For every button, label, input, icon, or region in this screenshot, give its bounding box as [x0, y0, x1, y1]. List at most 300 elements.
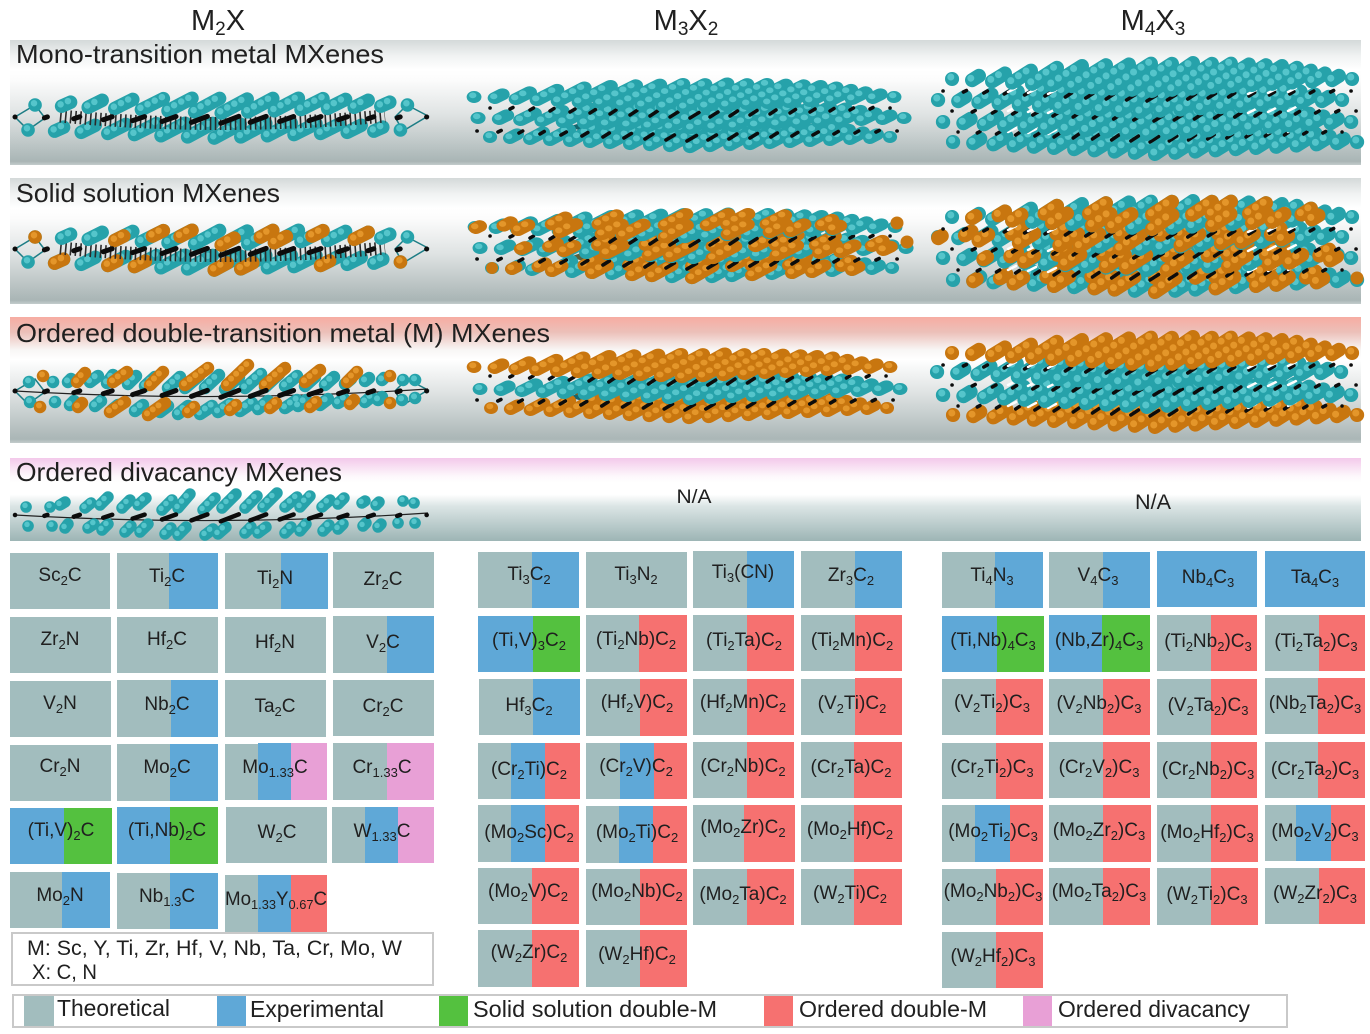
cell: (Mo2Ta2)C3: (Mo [1052, 881, 1084, 902]
cell: (V2Ti2)C3: (V [954, 692, 973, 713]
cell: Cr1.33C: 1.33 [373, 765, 398, 780]
note: M3X2 not applicable: N/A [676, 487, 712, 508]
cell: Ta4C3: 3 [1332, 575, 1339, 590]
cell: (V2Ti)C2: Ti)C [844, 693, 879, 714]
cell: (Ti2Nb2)C3: (Ti [1164, 631, 1186, 652]
cell: (Cr2Ta2)C3 [1265, 742, 1365, 798]
cell: Ti4N3: Ti [970, 565, 985, 586]
cell: Mo1.33C: 1.33 [269, 765, 294, 780]
cell: Nb1.3C: 1.3 [163, 894, 181, 909]
cell: Nb2C: Nb [144, 694, 169, 715]
cell: Hf3C2: C [532, 695, 545, 716]
cell: Ta2C: Ta [254, 696, 275, 717]
cell: (W2Zr2)C3 [1265, 868, 1365, 924]
cell: (Cr2Ti2)C3: 2 [977, 765, 984, 780]
cell: (V2Ta2)C3: Ta [1194, 695, 1214, 716]
cell: (V2Nb2)C3: Nb [1083, 693, 1107, 714]
cell: Mo2C: Mo [143, 757, 170, 778]
cell: Nb1.3C: C [181, 886, 195, 907]
column heading: M3X2: 2 [708, 19, 718, 40]
cell: (Mo2Zr)C2: 2 [733, 825, 740, 840]
cell: Nb2C: 2 [169, 702, 176, 717]
cell: Ta2C: C [282, 696, 296, 717]
cell: (V2Ti)C2: (V [818, 693, 837, 714]
cell: (Cr2V)C2: 2 [626, 764, 633, 779]
cell: Mo2N [10, 872, 110, 928]
cell: Mo1.33Y0.67C: 1.33 [251, 897, 276, 912]
cell: (Mo2Ta2)C3: 2 [1084, 889, 1092, 904]
cell: (Cr2V2)C3: )C [1112, 757, 1132, 778]
cell: (Mo2Nb2)C3: 3 [1035, 889, 1042, 904]
legend item: theoretical: Theoretical [57, 995, 170, 1021]
cell: Zr3C2: 2 [867, 573, 874, 588]
cell: Nb4C3: 4 [1206, 575, 1213, 590]
cell: (Cr2Ti2)C3: 3 [1026, 765, 1034, 780]
cell: (Mo2Hf2)C3 [1157, 805, 1258, 862]
cell: (Ti2Ta)C2: Ta)C [735, 630, 775, 651]
model: M4X3 ordered double-M [936, 335, 1357, 427]
cell: Cr2C [333, 680, 434, 736]
cell: (Mo2Ta)C2: 2 [779, 892, 787, 907]
cell: (Hf2Mn)C2: Mn)C [732, 692, 779, 713]
cell: (V2Ti)C2 [801, 678, 902, 735]
heading: ordered double-M: Ordered double-transition metal (M) MXenes [16, 318, 550, 348]
cell: (Ti2Ta)C2: 2 [775, 638, 782, 653]
cell: (Cr2Ta2)C3: 2 [1297, 767, 1305, 782]
cell: Ta2C [225, 680, 326, 737]
cell: (Cr2Nb2)C3: 2 [1220, 767, 1227, 782]
cell: Nb4C3: Nb [1182, 567, 1206, 588]
cell: (W2Hf2)C3 [942, 932, 1043, 988]
cell: (Cr2Nb)C2: (Cr [700, 756, 727, 777]
cell: (W2Zr2)C3: (W [1273, 883, 1297, 904]
cell: (W2Zr)C2: (W [491, 942, 515, 963]
cell: V2N: N [63, 693, 77, 714]
cell: Ti2N: 2 [272, 576, 279, 591]
cell: (W2Zr)C2 [478, 930, 579, 987]
cell: (Hf2V)C2: (Hf [601, 692, 626, 713]
column heading: M2X: 2 [215, 19, 226, 40]
cell: (V2Ta2)C3: 2 [1187, 703, 1194, 718]
cell: (Mo2Ti2)C3: )C [1011, 821, 1031, 842]
cell: (Mo2Sc)C2 [478, 805, 579, 862]
cell: (Hf2Mn)C2: 2 [725, 700, 732, 715]
cell: (Mo2Hf)C2 [801, 805, 902, 862]
cell: (Mo2Hf2)C3: )C [1226, 822, 1247, 843]
cell: (W2Zr)C2: Zr)C [522, 942, 560, 963]
cell: (Mo2Hf2)C3: (Mo [1160, 822, 1193, 843]
cell: Cr2C: C [390, 696, 404, 717]
cell: (Cr2Ti2)C3: Ti [984, 757, 999, 778]
cell: (W2Ti)C2: Ti)C [845, 883, 880, 904]
cell: (Mo2Zr)C2 [693, 805, 795, 862]
cell: (Mo2Ta)C2: (Mo [699, 884, 732, 905]
cell: Hf3C2: Hf [505, 695, 524, 716]
cell: (Mo2Nb)C2: (Mo [591, 881, 624, 902]
cell: Nb4C3 [1157, 551, 1257, 607]
cell: (Mo2Zr2)C3: 2 [1086, 828, 1093, 843]
cell: V2C: V [366, 632, 379, 653]
cell: (Mo2Nb)C2: Nb)C [631, 881, 676, 902]
cell: (Mo2V)C2 [478, 868, 579, 924]
cell: (Mo2Ti2)C3: 3 [1031, 829, 1038, 844]
column heading: M3X2: 3 [678, 19, 688, 40]
cell: (Ti2Ta2)C3: Ta [1303, 631, 1324, 652]
cell: (Cr2Ta2)C3: Ta [1305, 759, 1325, 780]
cell: (W2Ti2)C3 [1157, 868, 1258, 925]
cell: (Mo2Ti)C2 [586, 806, 687, 863]
cell: Zr3C2: 3 [846, 573, 853, 588]
cell: (Mo2Zr2)C3: (Mo [1053, 820, 1086, 841]
cell: W1.33C: C [397, 821, 410, 842]
cell: Nb4C3: C [1213, 567, 1227, 588]
cell: (Hf2Mn)C2 [693, 679, 794, 735]
cell: (Mo2Ta)C2: Ta)C [739, 884, 779, 905]
cell: (Cr2Ti)C2: (Cr [491, 759, 517, 780]
cell: (Mo2V2)C3: 2 [1324, 829, 1331, 844]
cell: (Cr2V)C2: V)C [633, 756, 666, 777]
cell: Cr1.33C: Cr [352, 757, 373, 778]
cell: Cr2C: Cr [362, 696, 383, 717]
cell: Mo1.33Y0.67C [225, 875, 327, 932]
cell: (Ti,Nb)4C3 [942, 616, 1044, 672]
cell: (Cr2V)C2: 2 [666, 764, 673, 779]
cell: (W2Ti2)C3: )C [1220, 884, 1240, 905]
cell: Ti3N2 [586, 552, 687, 608]
cell: (Mo2Zr)C2: (Mo [700, 817, 733, 838]
cell: Mo1.33Y0.67C: Mo [225, 889, 251, 910]
cell: (Cr2Nb2)C3: 3 [1247, 767, 1254, 782]
cell: (Cr2Ti2)C3 [942, 743, 1043, 799]
cell: Hf3C2: 2 [545, 703, 553, 718]
cell: Mo2N: 2 [63, 893, 70, 908]
cell: (Cr2Nb2)C3 [1157, 742, 1257, 798]
cell: (Ti2Ta2)C3: (Ti [1274, 631, 1296, 652]
cell: (V2Ta2)C3: 3 [1241, 703, 1248, 718]
cell: Ti2C: C [171, 566, 185, 587]
cell: (Cr2Nb2)C3: (Cr [1162, 759, 1188, 780]
cell: Ta4C3: 4 [1311, 575, 1318, 590]
cell: (Mo2Hf2)C3: Hf [1200, 822, 1220, 843]
cell: (W2Hf)C2 [586, 930, 687, 987]
cell: (V2Ta2)C3: 2 [1214, 703, 1221, 718]
cell: (Cr2Ti2)C3: )C [1006, 757, 1026, 778]
cell: V2C: C [386, 632, 400, 653]
cell: (W2Zr)C2: 2 [560, 950, 567, 965]
cell: V2N: V [43, 693, 56, 714]
heading: ordered divacancy: Ordered divacancy MXenes [16, 457, 342, 487]
cell: (Mo2Zr2)C3: 2 [1111, 828, 1118, 843]
cell: (Nb2Ta2)C3: 3 [1354, 701, 1361, 716]
legend item: ordered divacancy: Ordered divacancy [1058, 996, 1250, 1022]
cell: (Nb2Ta2)C3: )C [1334, 693, 1354, 714]
model: M2X divacancy [15, 491, 428, 535]
cell: (Mo2Hf)C2: 2 [840, 827, 847, 842]
cell: (V2Nb2)C3: 2 [1075, 701, 1083, 716]
cell: Ti3C2: 3 [522, 572, 530, 587]
cell: (Mo2Hf)C2: Hf)C [847, 819, 886, 840]
cell: Hf2N [225, 617, 326, 673]
column heading: M4X3: M [1121, 5, 1145, 37]
cell: (Ti2Nb)C2: 2 [617, 637, 625, 652]
cell: (Cr2Ta2)C3: )C [1332, 759, 1352, 780]
note: M4X3 not applicable: N/A [1135, 491, 1171, 514]
cell: (Cr2Ta2)C3: 3 [1352, 767, 1359, 782]
cell: (Mo2Sc)C2: 2 [566, 830, 574, 845]
cell: (W2Ti)C2: 2 [837, 891, 845, 906]
cell: (V2Nb2)C3 [1049, 679, 1150, 735]
cell: (Ti2Nb)C2 [586, 615, 687, 672]
heading: mono-transition metal: Mono-transition metal MXenes [16, 39, 384, 69]
cell: (W2Ti2)C3: 2 [1191, 892, 1198, 907]
cell: (Mo2V2)C3: 3 [1351, 829, 1359, 844]
cell: (Mo2V)C2: 2 [561, 889, 568, 904]
cell: (Nb2Ta2)C3: 2 [1299, 701, 1307, 716]
model: M3X2 mono [473, 82, 904, 147]
cell: (Ti,Nb)4C3: C [1015, 630, 1029, 651]
cell: (Cr2Ti)C2 [478, 743, 580, 799]
cell: (Nb2Ta2)C3: Ta [1307, 693, 1327, 714]
cell: Ti2N: N [279, 568, 293, 589]
cell: Cr2N: Cr [39, 756, 60, 777]
cell: Ti4N3 [942, 552, 1043, 608]
cell: (Mo2Zr)C2: Zr)C [740, 817, 778, 838]
cell: V4C3: 4 [1090, 573, 1097, 588]
cell: (Ti2Ta)C2: 2 [727, 638, 735, 653]
cell: (W2Hf)C2: (W [598, 944, 622, 965]
cell: (Cr2Ta)C2: 2 [837, 765, 844, 780]
cell: Ti2N [225, 553, 328, 609]
model: M4X3 solid solution [932, 199, 1364, 292]
cell: Ti3C2: C [530, 564, 543, 585]
cell: (Mo2Sc)C2: (Mo [484, 822, 517, 843]
cell: (Cr2V2)C3 [1049, 742, 1150, 798]
cell: (W2Hf2)C3: 2 [975, 954, 982, 969]
cell: (W2Zr2)C3: 2 [1297, 891, 1305, 906]
cell: (Ti,Nb)2C: C [192, 820, 206, 841]
cell: (V2Ti2)C3: Ti [980, 692, 995, 713]
cell: Nb4C3: 3 [1227, 575, 1234, 590]
cell: Nb1.3C: Nb [139, 886, 163, 907]
cell: (Hf2V)C2 [586, 679, 687, 736]
cell: (Mo2Zr)C2: 2 [778, 825, 786, 840]
cell: (V2Ti2)C3: )C [1003, 692, 1023, 713]
cell: Mo1.33C: C [294, 757, 308, 778]
cell: Ti4N3: 3 [1006, 573, 1014, 588]
cell: (Mo2Ti)C2: 2 [671, 830, 678, 845]
cell: Sc2C [10, 553, 110, 609]
cell: (Mo2Ti)C2: 2 [629, 830, 636, 845]
cell: (W2Hf2)C3: (W [950, 946, 975, 967]
cell: (W2Hf)C2: 2 [669, 952, 676, 967]
cell: Ti3C2 [478, 552, 579, 608]
cell: Ti2N: Ti [257, 568, 272, 589]
cell: (Ti,Nb)2C: 2 [185, 828, 192, 843]
cell: V4C3: C [1097, 565, 1111, 586]
cell: (Mo2V)C2: V)C [528, 881, 561, 902]
cell: (Ti,V)3C2: 2 [559, 638, 566, 653]
cell: (Mo2V2)C3 [1265, 805, 1365, 861]
cell: (Mo2Ti2)C3: 2 [1003, 829, 1011, 844]
model: M2X solid solution [15, 228, 428, 270]
cell: Zr3C2: Zr [828, 565, 846, 586]
cell: (Nb,Zr)4C3: 4 [1115, 638, 1122, 653]
cell: (Mo2Ti2)C3: Ti [988, 821, 1003, 842]
cell: (Cr2Ta)C2: (Cr [811, 757, 837, 778]
cell: (Nb,Zr)4C3: 3 [1136, 638, 1143, 653]
cell: Sc2C: 2 [61, 573, 68, 588]
cell: (Hf2Mn)C2: 2 [779, 700, 786, 715]
cell: V4C3: V [1078, 565, 1090, 586]
cell: Hf2N: Hf [255, 632, 274, 653]
cell: (Hf2Mn)C2: (Hf [700, 692, 725, 713]
cell: (V2Ta2)C3: )C [1221, 695, 1241, 716]
cell: (W2Ti)C2: (W [813, 883, 837, 904]
cell: Zr2N: 2 [58, 637, 66, 652]
cell: Ti3N2: 2 [650, 572, 658, 587]
cell: (Cr2Nb)C2: 2 [778, 764, 786, 779]
cell: (Ti2Ta2)C3: 2 [1296, 639, 1303, 654]
cell: (Mo2Sc)C2: 2 [517, 830, 524, 845]
cell: Cr2N: 2 [60, 764, 67, 779]
cell: Ti3C2: Ti [507, 564, 522, 585]
cell: Mo1.33Y0.67C: Y [276, 889, 289, 910]
cell: Mo2N: N [70, 885, 84, 906]
cell: (Ti,V)3C2: (Ti,V) [492, 630, 538, 651]
cell: W1.33C: 1.33 [371, 829, 397, 844]
cell: (Mo2Ti)C2: Ti)C [636, 822, 671, 843]
cell: (Ti,V)2C: C [81, 820, 94, 841]
cell: (Ti2Mn)C2: (Ti [811, 630, 832, 651]
cell: (Mo2Nb2)C3 [942, 869, 1043, 925]
cell: Ti3(CN): (CN) [734, 562, 774, 583]
cell: (W2Ti2)C3: 2 [1213, 892, 1220, 907]
note: allowed M and X elements: M: Sc, Y, Ti, Zr, Hf, V, Nb, Ta, Cr, Mo, W [27, 937, 402, 960]
cell: (Cr2Ta2)C3: (Cr [1271, 759, 1297, 780]
cell: (Mo2Zr2)C3: Zr [1093, 820, 1111, 841]
cell: Ta2C: 2 [275, 704, 282, 719]
panel: mono-transition metal MXenes [10, 39, 1361, 165]
cell: Ti2C: 2 [164, 574, 171, 589]
cell: (V2Ti2)C3 [942, 679, 1043, 735]
cell: Hf3C2 [479, 679, 580, 735]
cell: Ti3(CN) [693, 551, 794, 608]
cell: Nb2C [117, 680, 218, 737]
cell: (Mo2Nb)C2: 2 [624, 889, 631, 904]
note: allowed M and X elements: X: C, N [32, 961, 97, 984]
cell: (Mo2Nb2)C3: Nb [984, 881, 1008, 902]
panel: solid solution MXenes [10, 178, 1364, 304]
panel: ordered divacancy MXenes [10, 457, 1361, 541]
cell: (Mo2V2)C3: V [1311, 821, 1324, 842]
cell: (Ti2Nb2)C3: 2 [1217, 639, 1224, 654]
cell: (Cr2Nb2)C3: )C [1227, 759, 1247, 780]
cell: (Mo2V)C2: 2 [521, 889, 528, 904]
cell: Sc2C: Sc [38, 565, 61, 586]
cell: (Mo2Nb)C2 [586, 869, 687, 925]
cell: (W2Zr2)C3: 3 [1350, 891, 1357, 906]
cell: Ti3N2: N [637, 564, 650, 585]
cell: W2C [226, 807, 327, 863]
cell: (Cr2V)C2 [586, 743, 687, 799]
cell: (Mo2Ta2)C3: 3 [1139, 889, 1146, 904]
cell: Zr2C: Zr [364, 569, 381, 590]
cell: Ti4N3: 4 [985, 573, 993, 588]
cell: (Cr2V2)C3: (Cr [1059, 757, 1085, 778]
cell: Hf2N: 2 [274, 640, 281, 655]
cell: W2C: C [283, 822, 296, 843]
cell: Zr3C2 [801, 551, 902, 608]
cell: (Ti2Ta2)C3: 2 [1323, 639, 1330, 654]
cell: (Mo2V2)C3: 2 [1304, 829, 1311, 844]
cell: (Mo2Sc)C2: Sc)C [524, 822, 566, 843]
cell: (Ti2Nb2)C3: 3 [1245, 639, 1252, 654]
cell: (V2Ti)C2: 2 [879, 701, 886, 716]
cell: (Ti,V)3C2: C [545, 630, 559, 651]
model: M2X ordered double-M [15, 363, 428, 415]
column heading: M4X3: 4 [1145, 19, 1156, 40]
cell: (Mo2V2)C3: )C [1331, 821, 1351, 842]
cell: (W2Zr2)C3: 2 [1322, 891, 1330, 906]
cell: Ti2C: Ti [149, 566, 164, 587]
cell: Ta4C3: Ta [1291, 567, 1311, 588]
cell: Cr2N [10, 745, 111, 801]
cell: V4C3: 3 [1111, 573, 1118, 588]
cell: Cr2N: N [67, 756, 81, 777]
cell: (Mo2Ti2)C3 [942, 805, 1043, 862]
cell: (W2Zr2)C3: )C [1330, 883, 1350, 904]
cell: (Hf2V)C2: 2 [666, 700, 673, 715]
cell: Ti3N2: Ti [614, 564, 629, 585]
cell: (Mo2Ta2)C3: )C [1119, 881, 1139, 902]
cell: (Ti2Nb2)C3: )C [1224, 631, 1245, 652]
cell: (Cr2Nb)C2 [693, 742, 794, 798]
cell: (W2Hf)C2: Hf)C [630, 944, 669, 965]
cell: (Mo2Ta)C2: 2 [732, 892, 739, 907]
cell: (Mo2Hf)C2: 2 [886, 827, 893, 842]
cell: (Mo2Ti)C2: (Mo [596, 822, 629, 843]
cell: Zr2N: Zr [41, 629, 58, 650]
cell: (W2Zr)C2: 2 [515, 950, 522, 965]
cell: (Mo2Zr2)C3: )C [1118, 820, 1138, 841]
cell: Nb2C: C [176, 694, 190, 715]
cell: (Cr2Nb)C2: Nb)C [734, 756, 778, 777]
cell: (Cr2Ta)C2: Ta)C [844, 757, 884, 778]
cell: Zr2N: N [66, 629, 79, 650]
cell: (Cr2Ti)C2: Ti)C [525, 759, 560, 780]
cell: (W2Hf2)C3: )C [1008, 946, 1028, 967]
grid: M2X compositions [10, 552, 434, 932]
cell: (Ti2Mn)C2: Mn)C [840, 630, 886, 651]
cell: Sc2C: C [68, 565, 82, 586]
cell: (Mo2Ta)C2 [693, 869, 794, 925]
cell: Hf3C2: 3 [524, 703, 532, 718]
cell: (Mo2Ta2)C3: Ta [1092, 881, 1112, 902]
cell: (Cr2Ti)C2: 2 [560, 767, 567, 782]
cell: W2C: W [258, 822, 275, 843]
cell: (Mo2Nb2)C3: )C [1015, 881, 1035, 902]
cell: (Ti,V)3C2 [478, 616, 580, 672]
cell: Zr2C: 2 [381, 577, 389, 592]
cell: Zr3C2: C [853, 565, 867, 586]
cell: (Ti,Nb)2C: (Ti,Nb) [128, 820, 185, 841]
cell: (Ti2Ta2)C3: 3 [1350, 639, 1358, 654]
column heading: M3X2: M [654, 5, 678, 37]
cell: Zr2C [333, 552, 434, 608]
cell: Mo2C: 2 [170, 765, 177, 780]
cell: V2N [10, 681, 111, 737]
cell: (W2Hf2)C3: 3 [1028, 954, 1036, 969]
